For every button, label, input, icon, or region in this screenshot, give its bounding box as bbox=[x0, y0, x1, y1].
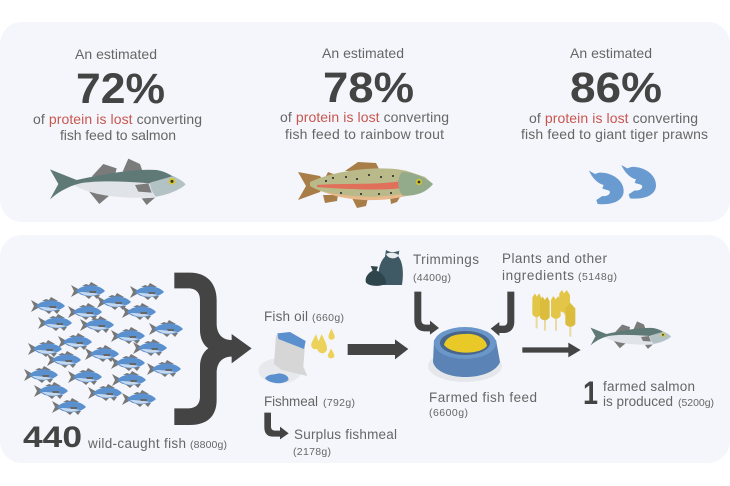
label: wild-caught fish: (8800g) bbox=[190, 439, 227, 451]
label: surplus fishmeal: (2178g) bbox=[293, 446, 331, 458]
label: farmed fish feed: Farmed fish feed bbox=[429, 390, 537, 405]
arrow: plants to feed bbox=[491, 292, 514, 336]
stat: salmon bbox=[33, 46, 202, 143]
stat: giant tiger prawns: 86% bbox=[570, 64, 662, 112]
label: wild-caught fish: wild-caught fish bbox=[87, 436, 186, 451]
stat: salmon: An estimated bbox=[75, 46, 157, 62]
icon: wheat bbox=[532, 290, 575, 337]
label: plants and other ingredients: ingredients bbox=[502, 268, 574, 283]
arrow: to feed bbox=[348, 339, 408, 359]
label: trimmings bbox=[413, 252, 479, 284]
brace arrow bbox=[174, 273, 252, 425]
stat: salmon: of protein is lost converting bbox=[33, 111, 202, 127]
stat: rainbow trout: of protein is lost converting bbox=[280, 109, 449, 125]
stat: salmon: 72% bbox=[76, 65, 165, 113]
arrow: feed to salmon bbox=[522, 343, 581, 357]
stat: giant tiger prawns: An estimated bbox=[570, 45, 652, 61]
icon: trimmings bags bbox=[366, 250, 403, 286]
label: 1 farmed salmon is produced: (5200g) bbox=[678, 397, 714, 409]
label: surplus fishmeal bbox=[293, 427, 397, 458]
stat: rainbow trout: An estimated bbox=[322, 45, 404, 61]
label: fishmeal: Fishmeal bbox=[264, 394, 318, 409]
label: fish oil bbox=[264, 309, 344, 324]
arrow: to surplus fishmeal bbox=[264, 413, 289, 439]
label: plants and other ingredients: (5148g) bbox=[578, 271, 617, 283]
label: 1 farmed salmon is produced: is produced bbox=[603, 394, 673, 409]
panel: protein loss statistics bbox=[0, 22, 730, 222]
label: plants and other ingredients bbox=[502, 251, 617, 283]
label: fish oil: Fish oil bbox=[264, 309, 308, 324]
icon: fishmeal sack and oil drops bbox=[258, 328, 335, 383]
label: trimmings: (4400g) bbox=[413, 272, 451, 284]
label: wild-caught fish: 440 bbox=[23, 421, 82, 454]
label: wild-caught fish bbox=[23, 421, 227, 454]
stat: giant tiger prawns bbox=[521, 45, 708, 142]
label: 1 farmed salmon is produced: farmed salmon bbox=[603, 379, 695, 394]
arrow: trimmings to feed bbox=[414, 292, 439, 335]
icon: rainbow trout bbox=[298, 162, 433, 208]
label: surplus fishmeal: Surplus fishmeal bbox=[294, 427, 397, 442]
stat: giant tiger prawns: fish feed to giant tiger prawns bbox=[521, 126, 708, 142]
stat: rainbow trout: 78% bbox=[323, 64, 414, 112]
stat: rainbow trout: fish feed to rainbow trout bbox=[285, 126, 444, 142]
stat: rainbow trout bbox=[280, 45, 449, 142]
label: 1 farmed salmon is produced bbox=[583, 375, 714, 411]
label: fish oil: (660g) bbox=[312, 312, 344, 324]
label: plants and other ingredients: Plants and other bbox=[502, 251, 608, 266]
icon: salmon bbox=[50, 159, 186, 205]
label: farmed fish feed: (6600g) bbox=[429, 407, 468, 419]
label: trimmings: Trimmings bbox=[413, 252, 479, 267]
label: 1 farmed salmon is produced: 1 bbox=[583, 375, 598, 411]
label: farmed fish feed bbox=[429, 390, 537, 419]
panel: production flow bbox=[0, 235, 730, 463]
stat: salmon: fish feed to salmon bbox=[60, 127, 176, 143]
icon: feed bowl bbox=[428, 327, 502, 382]
stat: giant tiger prawns: of protein is lost converting bbox=[529, 110, 698, 126]
label: fishmeal: (792g) bbox=[323, 397, 355, 409]
icon: farmed salmon bbox=[590, 321, 671, 349]
icon: prawns bbox=[589, 165, 656, 204]
label: fishmeal bbox=[264, 394, 355, 409]
school of wild-caught fish bbox=[24, 282, 183, 415]
